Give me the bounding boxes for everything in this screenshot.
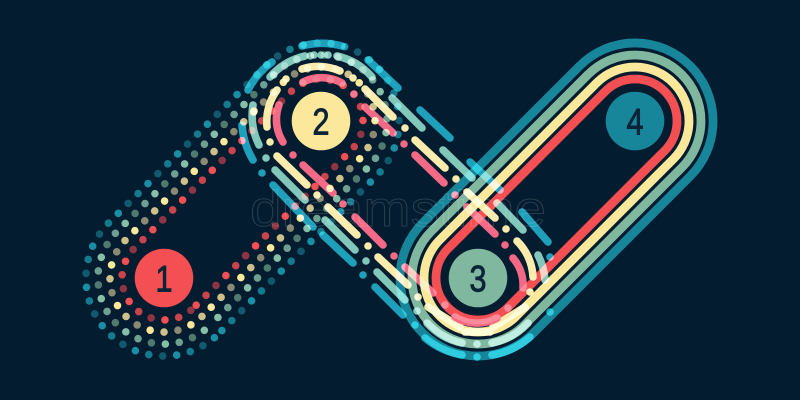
step 4 badge: 4 <box>626 102 644 142</box>
step 1 badge <box>135 249 193 307</box>
step 3 badge: 3 <box>470 258 486 300</box>
dotted link between steps 1 and 2 <box>86 43 399 356</box>
step 1 badge: 1 <box>156 258 172 300</box>
solid link between steps 3 and 4 <box>400 43 713 356</box>
step 2 badge <box>292 92 350 150</box>
step 2 badge: 2 <box>312 102 330 142</box>
step 3 badge <box>449 249 507 307</box>
step 4 badge <box>606 92 664 150</box>
watermark: dreamstime <box>250 181 546 237</box>
dashed link between steps 2 and 3 <box>242 43 550 357</box>
